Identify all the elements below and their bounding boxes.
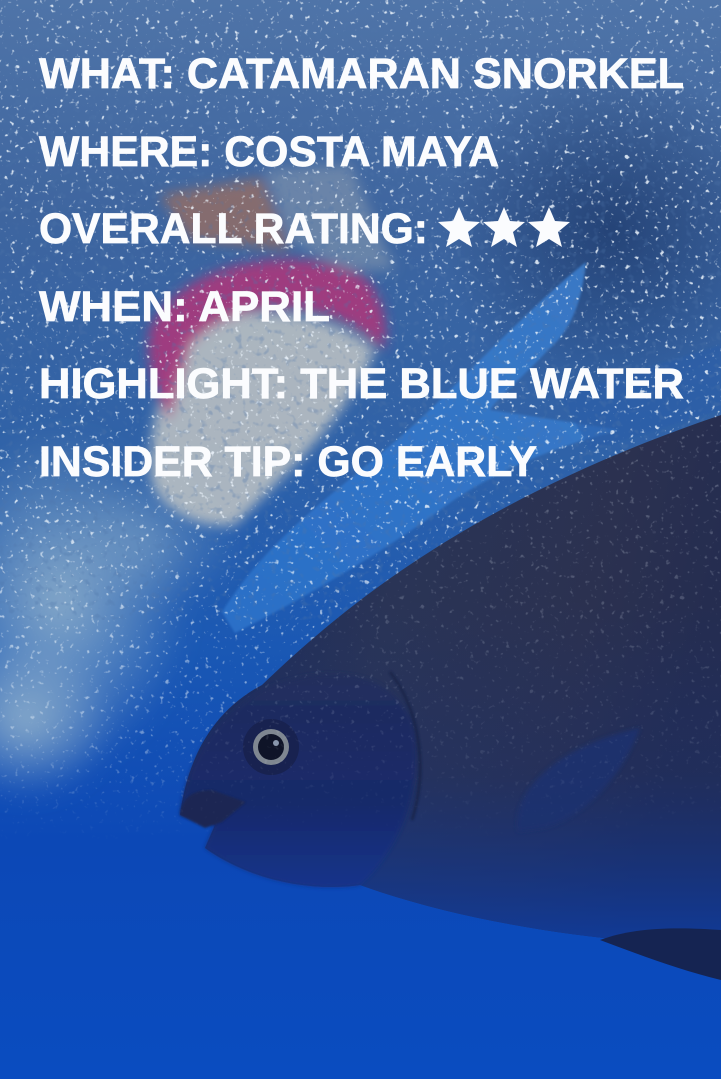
figure: blurred snorkeler [149,165,395,526]
snorkeler orange top [160,178,290,250]
fish body [180,415,721,945]
bubbles: light speckles over the upper water [0,0,721,830]
fish: large dark fish [180,415,721,980]
foam: bubbly water on the left [0,430,240,800]
line: highlight: HIGHLIGHT: THE BLUE WATER [39,360,684,408]
fish gill line [390,672,420,820]
icon: three stars [438,207,570,247]
snorkeler pale body [150,313,375,526]
bubbles: faint speckles on the fish [187,416,721,799]
fish belly fin [600,928,721,980]
fish head [180,674,416,887]
bubbles: dark speckles [0,0,721,620]
fish pectoral fin [517,728,640,832]
fish eye [243,719,299,775]
line: what: WHAT: CATAMARAN SNORKEL [39,50,684,98]
line: where: WHERE: COSTA MAYA [39,128,499,176]
fish mouth [180,790,246,828]
line: insider tip: INSIDER TIP: GO EARLY [39,438,537,486]
text block: trip details [39,50,684,486]
snorkeler pale torso [265,165,395,270]
line: overall rating: OVERALL RATING: [39,205,428,253]
shadow: darker water top right [440,60,721,400]
fin: long blue fin [222,262,721,633]
snorkeler pink swimwear [149,259,386,420]
line: when: WHEN: APRIL [39,283,330,331]
